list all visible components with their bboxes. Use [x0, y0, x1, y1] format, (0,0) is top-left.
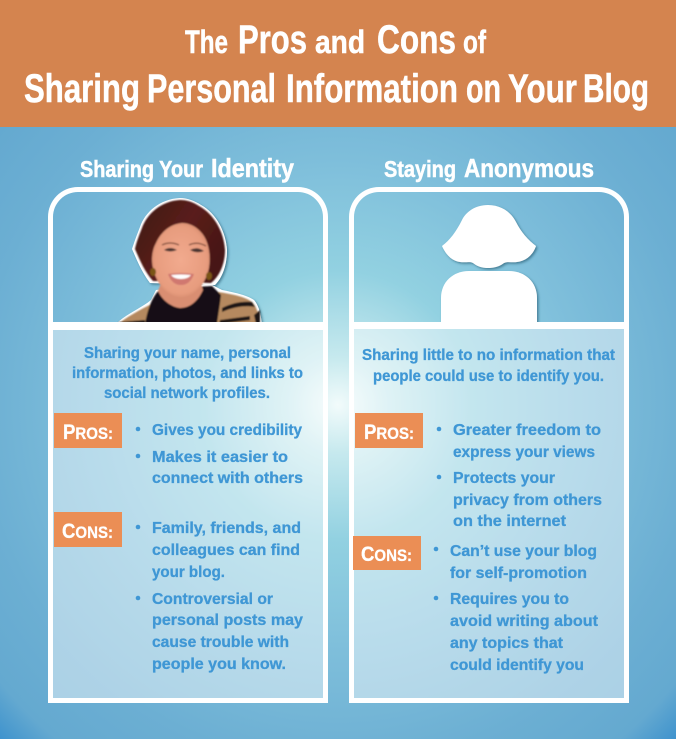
- cons list: people you know.: [152, 656, 286, 673]
- cons list: cause trouble with: [152, 634, 289, 651]
- title banner: and: [315, 24, 365, 60]
- cons list: Family, friends, and: [152, 520, 301, 537]
- cons label: CONS:: [62, 520, 113, 543]
- pros list: [437, 422, 602, 530]
- heading: sharing your identity: Sharing Your: [80, 156, 203, 182]
- icon: anonymous silhouette: [441, 205, 537, 330]
- cons list: [434, 543, 599, 674]
- cons label: CONS:: [361, 543, 412, 566]
- title banner: Sharing: [24, 67, 140, 111]
- card frame: [48, 187, 328, 703]
- cons list: Requires you to: [450, 591, 569, 608]
- title banner: on: [466, 67, 501, 111]
- description: Sharing little to no information that: [362, 347, 616, 364]
- cons list: colleagues can find: [152, 542, 300, 559]
- heading: sharing your identity: Identity: [211, 153, 294, 183]
- panel: staying anonymous: [349, 187, 629, 703]
- title banner: Blog: [583, 67, 649, 111]
- cons list: Controversial or: [152, 591, 273, 608]
- description: [362, 347, 616, 385]
- cons list: avoid writing about: [450, 613, 599, 630]
- cons list: personal posts may: [152, 612, 303, 629]
- heading: staying anonymous: [384, 153, 594, 183]
- heading: sharing your identity: [80, 153, 294, 183]
- card frame: [349, 187, 629, 703]
- pros label: PROS:: [63, 421, 113, 444]
- pros list: express your views: [453, 444, 595, 461]
- pros label: PROS:: [364, 421, 414, 444]
- cons list: could identify you: [450, 657, 584, 674]
- title banner: of: [463, 24, 486, 60]
- pros list: privacy from others: [453, 492, 602, 509]
- panel: sharing your identity: [48, 187, 328, 703]
- pros list: Gives you credibility: [152, 422, 302, 439]
- description: Sharing your name, personal: [84, 345, 291, 362]
- pros list: Greater freedom to: [453, 422, 601, 439]
- portrait photo: [114, 198, 262, 326]
- description: information, photos, and links to: [72, 365, 303, 382]
- cons list: for self-promotion: [450, 565, 587, 582]
- title banner: Your: [508, 67, 577, 111]
- pros list: Makes it easier to: [152, 449, 288, 466]
- cons list: any topics that: [450, 635, 564, 652]
- description: people could use to identify you.: [373, 368, 604, 385]
- title banner: Information: [286, 67, 458, 111]
- title banner: The: [185, 24, 228, 60]
- pros list: [136, 422, 303, 487]
- title banner: Cons: [377, 18, 456, 62]
- description: [72, 345, 303, 402]
- pros list: on the internet: [453, 513, 567, 530]
- description: social network profiles.: [104, 385, 270, 402]
- heading: staying anonymous: Anonymous: [464, 153, 594, 183]
- title banner: Personal: [147, 67, 276, 111]
- pros label: [54, 413, 122, 448]
- pros list: Protects your: [453, 470, 555, 487]
- cons list: your blog.: [152, 564, 225, 581]
- pros label: [355, 413, 423, 448]
- title banner: [0, 0, 676, 127]
- cons label: [353, 536, 421, 570]
- cons label: [54, 512, 122, 547]
- text panel fill: [354, 329, 624, 698]
- heading: staying anonymous: Staying: [384, 156, 456, 182]
- text panel fill: [53, 330, 323, 698]
- cons list: [136, 520, 303, 673]
- pros list: connect with others: [152, 470, 303, 487]
- title banner: Pros: [238, 18, 307, 62]
- cons list: Can’t use your blog: [450, 543, 597, 560]
